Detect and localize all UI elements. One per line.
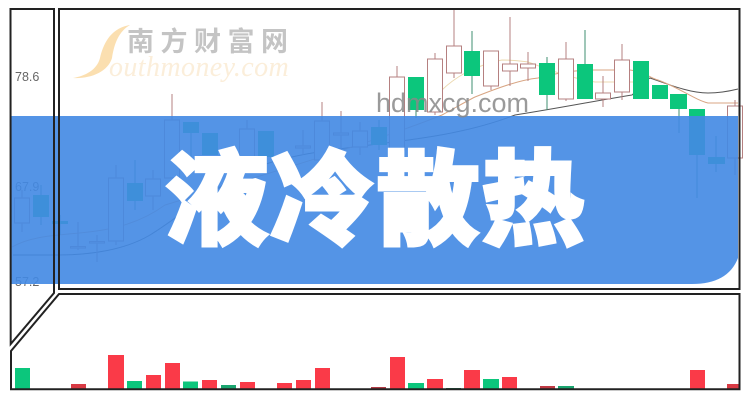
axis labels: 67.9 (15, 180, 39, 194)
title: 散 (376, 143, 480, 258)
watermark: hdmxcg.com: hdmxcg.com (376, 88, 529, 118)
title: 冷 (270, 143, 374, 258)
logo: southmoney (73, 20, 294, 83)
title: 液 (166, 143, 268, 258)
axis labels (15, 70, 39, 289)
volume bars (15, 355, 740, 389)
title: 热 (482, 143, 584, 258)
candlestick chart (14, 9, 742, 262)
axis labels: 78.6 (15, 70, 39, 84)
logo: southmoney: outhmoney.com (109, 52, 289, 83)
blue banner (11, 116, 738, 284)
logo: southmoney: 南方财富网 (127, 20, 294, 59)
moving average lines (12, 60, 738, 255)
axis labels: 57.2 (15, 275, 39, 289)
